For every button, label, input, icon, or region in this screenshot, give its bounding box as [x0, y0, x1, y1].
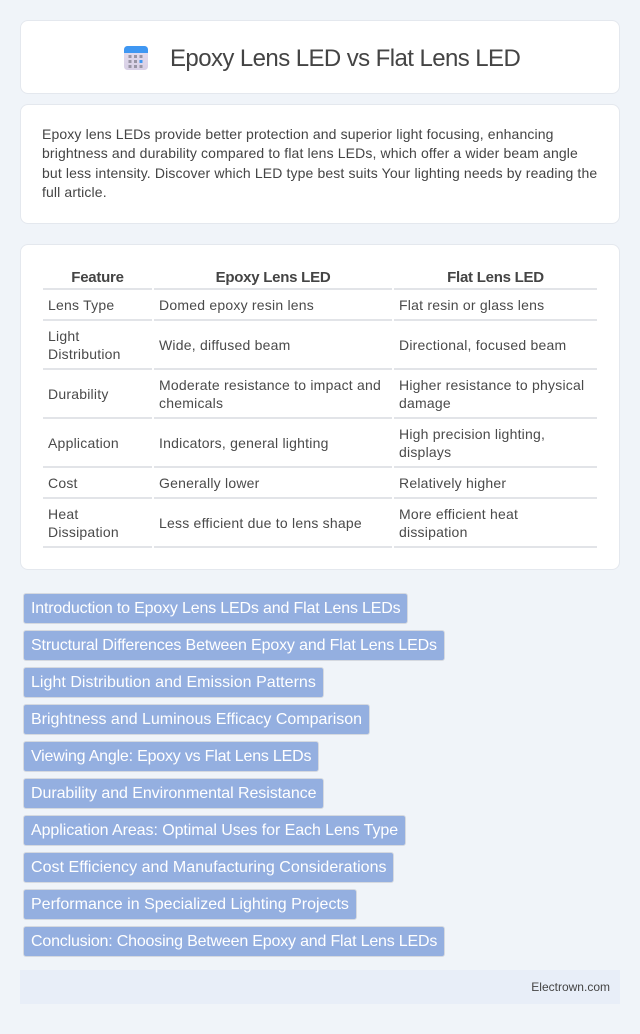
- header: Epoxy Lens LED: Epoxy Lens LED: [216, 269, 330, 286]
- link: application areas: Application Areas: Optimal Uses for Each Lens Type: [31, 822, 398, 839]
- link: brightness: [23, 704, 370, 735]
- footer source text: Electrown.com: [531, 980, 610, 994]
- link: brightness: Brightness and Luminous Efficacy Comparison: [31, 711, 362, 728]
- comparison table: [43, 269, 597, 548]
- intro paragraph: full article.: [42, 184, 107, 200]
- intro paragraph: brightness and durability compared to flat lens LEDs, which offer a wider beam angle: [42, 145, 578, 161]
- section links list: [23, 593, 445, 957]
- row: Application: [48, 426, 545, 460]
- intro text panel: [20, 104, 620, 224]
- header: Feature: Feature: [71, 269, 124, 286]
- row: Durability: damage: [399, 395, 451, 411]
- row: Heat Dissipation: More efficient heat: [399, 506, 518, 522]
- link: cost efficiency: Cost Efficiency and Manufacturing Considerations: [31, 859, 387, 876]
- icon: calendar: [124, 46, 148, 70]
- row: Light Distribution: Wide, diffused beam: [159, 337, 291, 353]
- row: Heat Dissipation: Less efficient due to lens shape: [159, 515, 362, 531]
- row: Cost: Relatively higher: [399, 475, 506, 491]
- row: Heat Dissipation: Dissipation: [48, 524, 119, 540]
- row: Light Distribution: Distribution: [48, 346, 121, 362]
- comparison table panel: [20, 244, 620, 570]
- link: cost efficiency: [23, 852, 394, 883]
- header: Flat Lens LED: Flat Lens LED: [447, 269, 544, 286]
- row: Heat Dissipation: Heat: [48, 506, 78, 522]
- footer bar: [20, 970, 620, 1004]
- link: structural differences: Structural Differences Between Epoxy and Flat Lens LEDs: [31, 637, 437, 654]
- row: Heat Dissipation: [48, 506, 518, 540]
- row: Cost: [48, 475, 506, 491]
- row: Durability: chemicals: [159, 395, 223, 411]
- link: specialized projects: Performance in Specialized Lighting Projects: [31, 896, 349, 913]
- link: conclusion: Conclusion: Choosing Between Epoxy and Flat Lens LEDs: [31, 933, 437, 950]
- link: introduction: Introduction to Epoxy Lens LEDs and Flat Lens LEDs: [31, 600, 400, 617]
- row: Application: Application: [48, 435, 119, 451]
- link: durability: Durability and Environmental Resistance: [31, 785, 316, 802]
- row: Light Distribution: Directional, focused beam: [399, 337, 566, 353]
- row: Application: displays: [399, 444, 451, 460]
- link: light distribution: Light Distribution and Emission Patterns: [31, 674, 316, 691]
- row: Heat Dissipation: dissipation: [399, 524, 468, 540]
- row: Cost: Cost: [48, 475, 78, 491]
- row: Lens Type: Flat resin or glass lens: [399, 297, 544, 313]
- link: specialized projects: [23, 889, 357, 920]
- row: Application: High precision lighting,: [399, 426, 545, 442]
- link: viewing angle: Viewing Angle: Epoxy vs Flat Lens LEDs: [31, 748, 311, 765]
- link: conclusion: [23, 926, 445, 957]
- link: light distribution: [23, 667, 324, 698]
- header panel: [20, 20, 620, 94]
- row: Lens Type: Lens Type: [48, 297, 114, 313]
- intro paragraph: [42, 126, 597, 200]
- link: introduction: [23, 593, 408, 624]
- intro paragraph: but less intensity. Discover which LED type best suits Your lighting needs by reading the: [42, 165, 597, 181]
- row: Durability: Durability: [48, 386, 109, 402]
- title: Epoxy Lens LED vs Flat Lens LED: [170, 45, 520, 72]
- row: Light Distribution: [48, 328, 566, 362]
- row: Light Distribution: Light: [48, 328, 79, 344]
- link: application areas: [23, 815, 406, 846]
- link: durability: [23, 778, 324, 809]
- intro paragraph: Epoxy lens LEDs provide better protection and superior light focusing, enhancing: [42, 126, 554, 142]
- row: Lens Type: [48, 297, 544, 313]
- row: Durability: Moderate resistance to impact and: [159, 377, 381, 393]
- row: Durability: [48, 377, 584, 411]
- row: Durability: Higher resistance to physical: [399, 377, 584, 393]
- row: Application: Indicators, general lighting: [159, 435, 329, 451]
- link: structural differences: [23, 630, 445, 661]
- row: Lens Type: Domed epoxy resin lens: [159, 297, 314, 313]
- row: Cost: Generally lower: [159, 475, 260, 491]
- link: viewing angle: [23, 741, 319, 772]
